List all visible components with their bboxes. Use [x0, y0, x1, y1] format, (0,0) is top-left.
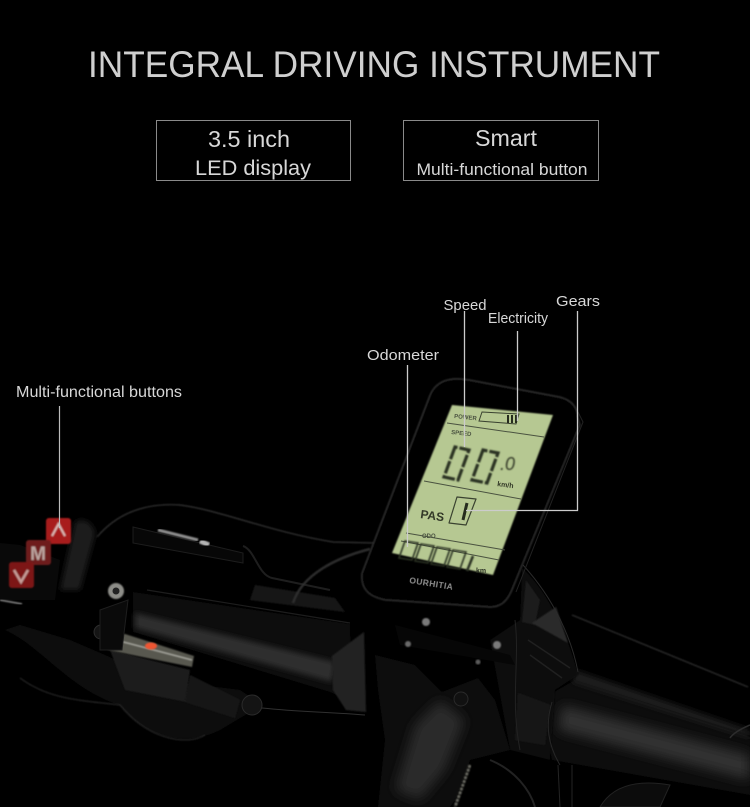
stem: [375, 618, 572, 807]
handlebar clamp: [490, 565, 670, 807]
feature box: smart button: Smart: [475, 125, 538, 151]
LCD divider lines: [401, 423, 544, 560]
odometer unit: km: [476, 568, 486, 575]
feature box: LED display: 3.5 inch: [208, 126, 290, 152]
gear box: [449, 497, 476, 525]
button: down: [9, 562, 34, 588]
gear digit: [463, 503, 467, 520]
feature box: LED display: [156, 120, 350, 180]
callout: gears: Gears: [556, 293, 600, 310]
LCD screen: [392, 405, 553, 575]
feature box: smart button: [404, 120, 598, 180]
callout: odometer: Odometer: [367, 347, 439, 364]
shifter and brake lever: [5, 583, 365, 740]
brake cable and upper controller: [60, 505, 375, 612]
callout: speed: Speed: [444, 297, 486, 314]
title: INTEGRAL DRIVING INSTRUMENT: [88, 43, 660, 85]
remote buttons: [9, 518, 71, 588]
handlebar left section: [0, 543, 366, 712]
PAS label: PAS: [420, 507, 445, 524]
callout: electricity: Electricity: [488, 311, 549, 327]
power bar: [454, 412, 519, 424]
display unit: [362, 379, 583, 607]
feature box: LED display: LED display: [195, 156, 311, 180]
callout: electricity: [488, 311, 549, 421]
speed decimal: .0: [500, 454, 515, 474]
button: mode: M: [30, 544, 46, 565]
speed unit: km/h: [497, 481, 514, 490]
feature box: smart button: Multi-functional button: [416, 161, 588, 179]
power bar: POWER: [454, 414, 478, 422]
speed label: SPEED: [451, 430, 472, 438]
callout: gears: [466, 293, 600, 510]
odo label: ODO: [422, 534, 436, 540]
brand logo: OURHITIA: [409, 575, 454, 592]
handlebar right section: [540, 615, 750, 795]
speed digits: [444, 447, 498, 483]
callout: multi-functional buttons: Multi-functional buttons: [16, 384, 182, 401]
display bezel: [362, 379, 580, 607]
odometer digits: [399, 541, 473, 571]
button: up: [46, 518, 71, 544]
